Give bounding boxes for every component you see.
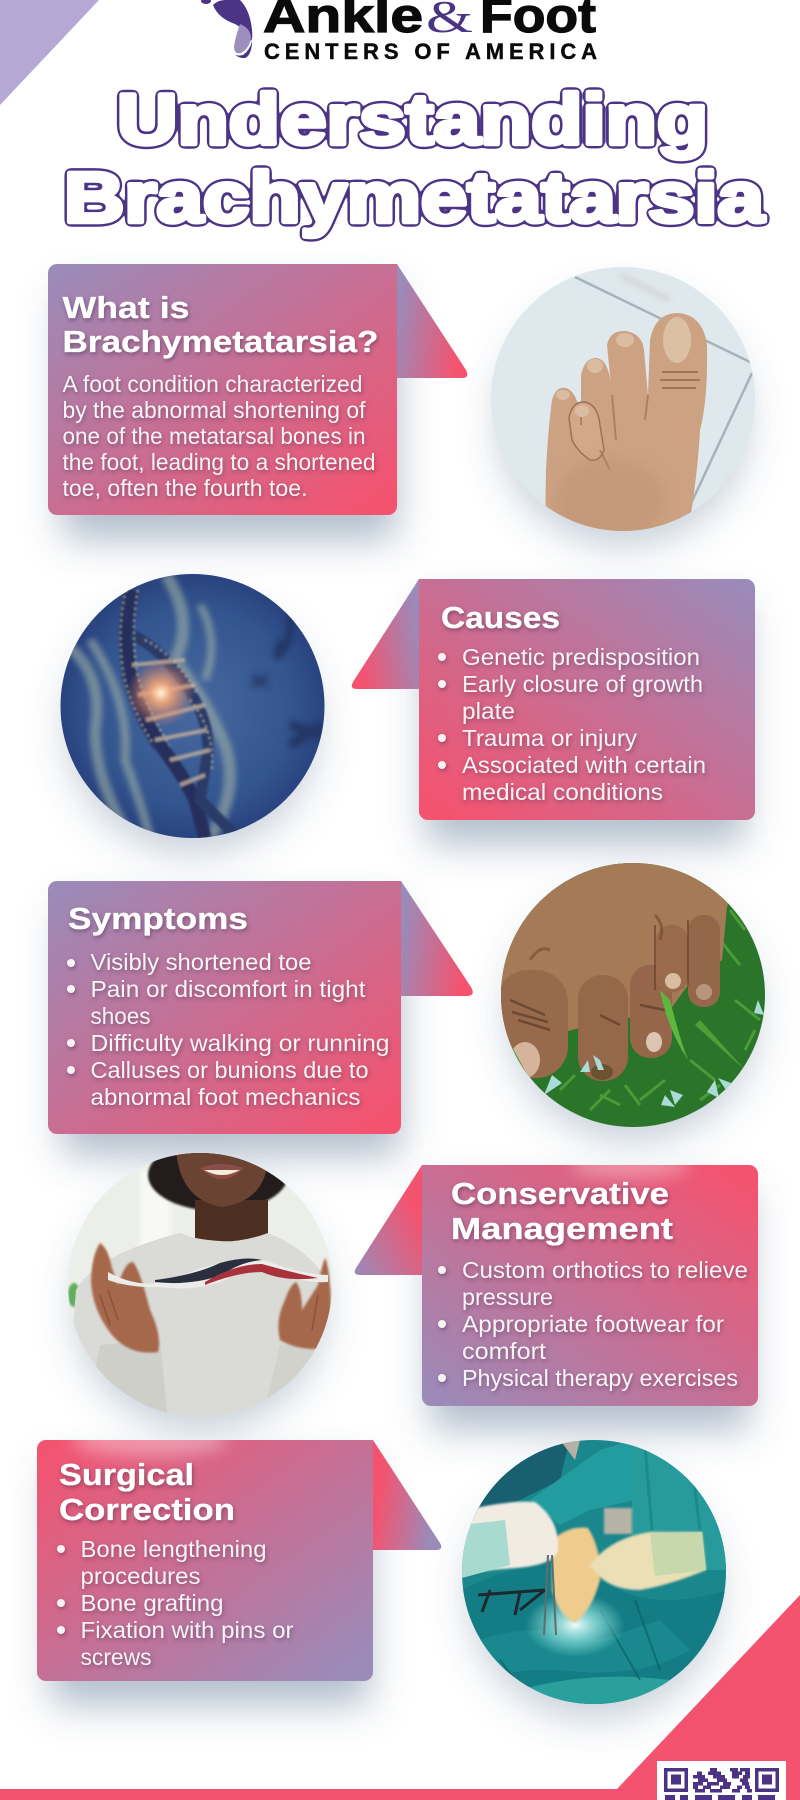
panel: symptoms xyxy=(48,881,473,1156)
bullet list: Custom orthotics to relieve xyxy=(462,1257,748,1283)
bullet list: Difficulty walking or running xyxy=(90,1030,390,1056)
description text xyxy=(62,371,376,501)
logo: Ankle & Foot Centers of America xyxy=(201,0,597,64)
heading xyxy=(451,1176,673,1246)
logo wordmark: CENTERS OF AMERICA xyxy=(264,39,597,64)
bottom-right corner triangle and footer bar xyxy=(0,1595,800,1800)
bullet list: Appropriate footwear for xyxy=(462,1311,724,1337)
panel: surgical correction xyxy=(37,1426,441,1705)
bullet list xyxy=(67,949,390,1110)
callout pointer xyxy=(352,579,419,689)
heading: Correction xyxy=(59,1492,235,1527)
panel background xyxy=(422,1165,758,1406)
icon: foot logo mark xyxy=(201,0,252,58)
description text: A foot condition characterized xyxy=(62,371,362,397)
panel background xyxy=(37,1440,373,1681)
callout pointer xyxy=(401,881,473,996)
panel background xyxy=(48,881,401,1134)
photo: surgery xyxy=(460,1438,728,1720)
title: Brachymetatarsia xyxy=(64,159,765,238)
description text: toe, often the fourth toe. xyxy=(62,475,308,501)
bullet list: abnormal foot mechanics xyxy=(90,1084,360,1110)
heading: Brachymetatarsia? xyxy=(62,324,378,359)
QR code xyxy=(657,1761,786,1800)
photo: foot on grass xyxy=(495,855,766,1142)
bullet list xyxy=(438,1257,748,1391)
description text: by the abnormal shortening of xyxy=(62,397,366,423)
bullet list: Calluses or bunions due to xyxy=(90,1057,368,1083)
bullet list: Fixation with pins or xyxy=(80,1617,294,1643)
bullet list: Visibly shortened toe xyxy=(90,949,312,975)
bullet list: pressure xyxy=(462,1284,553,1310)
bullet list xyxy=(57,1536,294,1670)
photo: DNA helix xyxy=(60,574,326,854)
photo: foot with short toe xyxy=(490,265,756,547)
bullet list: screws xyxy=(80,1644,152,1670)
panel background xyxy=(48,264,397,515)
panel: causes xyxy=(352,579,755,844)
logo wordmark xyxy=(263,0,597,64)
bullet list: medical conditions xyxy=(462,779,663,805)
top-left corner triangle xyxy=(0,0,99,105)
heading: Surgical xyxy=(59,1457,194,1492)
panel highlight xyxy=(68,1440,232,1464)
heading xyxy=(62,290,378,359)
heading: Symptoms xyxy=(68,901,248,936)
bullet list: Pain or discomfort in tight xyxy=(90,976,366,1002)
bullet list xyxy=(438,644,706,805)
title: Understanding xyxy=(117,81,708,160)
panel background xyxy=(419,579,755,820)
bullet list: Trauma or injury xyxy=(462,725,638,751)
callout pointer xyxy=(355,1165,422,1275)
bullet list: Bone lengthening xyxy=(80,1536,266,1562)
heading: Management xyxy=(451,1211,673,1246)
callout pointer xyxy=(373,1440,441,1550)
bullet list: shoes xyxy=(90,1003,150,1029)
bullet list: procedures xyxy=(80,1563,200,1589)
heading xyxy=(59,1457,235,1527)
panel: conservative management xyxy=(355,1154,758,1430)
bullet list: Bone grafting xyxy=(80,1590,224,1616)
description text: the foot, leading to a shortened xyxy=(62,449,376,475)
heading: Conservative xyxy=(451,1176,669,1211)
description text: one of the metatarsal bones in xyxy=(62,423,366,449)
bullet list: Physical therapy exercises xyxy=(462,1365,738,1391)
panel: what is brachymetatarsia xyxy=(48,264,467,540)
title xyxy=(64,81,765,238)
callout pointer xyxy=(397,264,467,378)
panel highlight xyxy=(568,1165,692,1186)
heading: What is xyxy=(62,290,190,325)
heading: Causes xyxy=(441,600,560,635)
bullet list: comfort xyxy=(462,1338,547,1364)
bullet list: Associated with certain xyxy=(462,752,706,778)
bullet list: Genetic predisposition xyxy=(462,644,700,670)
bullet list: Early closure of growth xyxy=(462,671,703,697)
bullet list: plate xyxy=(462,698,515,724)
photo: woman holding orthotic insole xyxy=(65,1139,332,1432)
